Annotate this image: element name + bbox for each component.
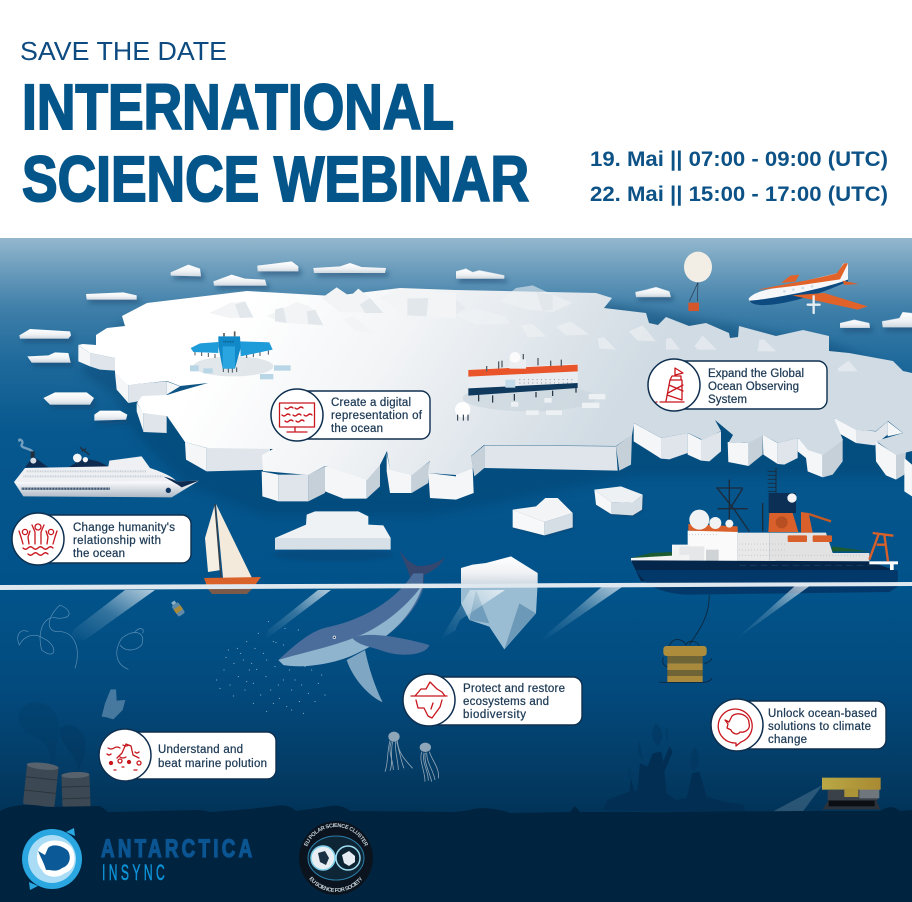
callout: create a digital representation: representation of [331,410,423,422]
plastic bag [102,689,125,719]
plastic bottle [170,599,185,617]
waterline [0,582,912,590]
survey rover [773,778,881,812]
callout: unlock ocean-based solutions: solutions to climate [768,721,871,733]
icon: digital ocean screen [280,403,314,432]
dates: 19. Mai || 07:00 - 09:00 (UTC) [590,147,888,171]
icon: antarctica speech bubble [718,709,752,746]
blue research station [190,331,291,379]
callout: unlock ocean-based solutions: Unlock ocean-based [768,708,877,720]
callout: change humanity's relationship [12,513,191,565]
dates: 22. Mai || 15:00 - 17:00 (UTC) [590,182,888,206]
small ice floes [19,261,912,421]
red research station [455,352,605,421]
callout: expand observing system: Expand the Global [708,368,804,380]
callout: understand marine pollution [99,729,276,781]
krill swarm [217,622,325,713]
callout: create a digital representation: Create a digital [331,397,411,409]
logo wordmark: ANTARCTICA [101,834,255,863]
drifting ice floes [273,486,643,561]
ice shelf surface [78,288,912,480]
callout: understand marine pollution: beat marine polution [158,758,267,770]
callout: protect and restore: Protect and restore [463,683,565,695]
callout: protect and restore: biodiversity [463,709,526,721]
weather balloon [684,252,712,311]
callout: understand marine pollution: Understand and [158,744,243,756]
whale tail [399,549,445,590]
callout: expand observing system [648,359,827,411]
callout: change humanity's relationship: Change humanity's [73,522,175,534]
mooring winch [659,595,712,682]
header [20,36,888,215]
callout: expand observing system: Ocean Observing [708,381,799,393]
callout: change humanity's relationship: relationship with [73,535,161,547]
logo: antarctica insync [22,828,255,890]
iceberg [461,556,538,649]
callout: expand observing system: System [708,394,747,406]
research vessel [631,468,898,581]
hydrothermal vents [603,723,746,813]
logo: eu polar science cluster [299,821,373,895]
heading: save the date: SAVE THE DATE [20,36,227,66]
shelf shadow [78,294,912,516]
cruise ship [14,440,199,497]
vessel hull below water [636,570,898,595]
icon: iceberg [411,682,447,718]
title: INTERNATIONAL [22,71,454,143]
scene: ocean above water [0,238,912,588]
callout: unlock ocean-based solutions [711,699,886,751]
jellyfish [385,732,439,782]
fishing net debris [18,605,143,669]
oil barrels with smoke [18,702,91,810]
title: SCIENCE WEBINAR [22,143,529,215]
light rays [70,585,811,640]
callout: create a digital representation: the ocean [331,423,383,435]
logo wordmark [101,834,255,885]
icon: observation buoy [656,368,684,402]
logo mark [22,828,82,890]
icon: people and waves [19,524,57,555]
humpback whale [278,549,445,702]
callout: change humanity's relationship: the ocean [73,548,125,560]
ice hills [209,285,858,371]
sailboat [204,504,261,594]
ice shelf front faces [78,345,912,501]
callout: protect and restore [403,674,582,726]
logo: eu polar science cluster: EU SCIENCE FOR SOCIETY [309,876,362,892]
dates [590,147,888,206]
sea floor [0,805,912,902]
research plane [749,263,868,313]
logo wordmark: INSYNC [102,860,168,885]
logo: eu polar science cluster: EU POLAR SCIENCE CLUSTER [304,823,368,846]
callout: create a digital representation [271,389,430,441]
callout: protect and restore: ecosystems and [463,696,549,708]
scene: ocean below water [0,586,912,816]
title [22,71,529,215]
callout: unlock ocean-based solutions: change [768,734,807,746]
icon: marine pollution [107,744,141,770]
